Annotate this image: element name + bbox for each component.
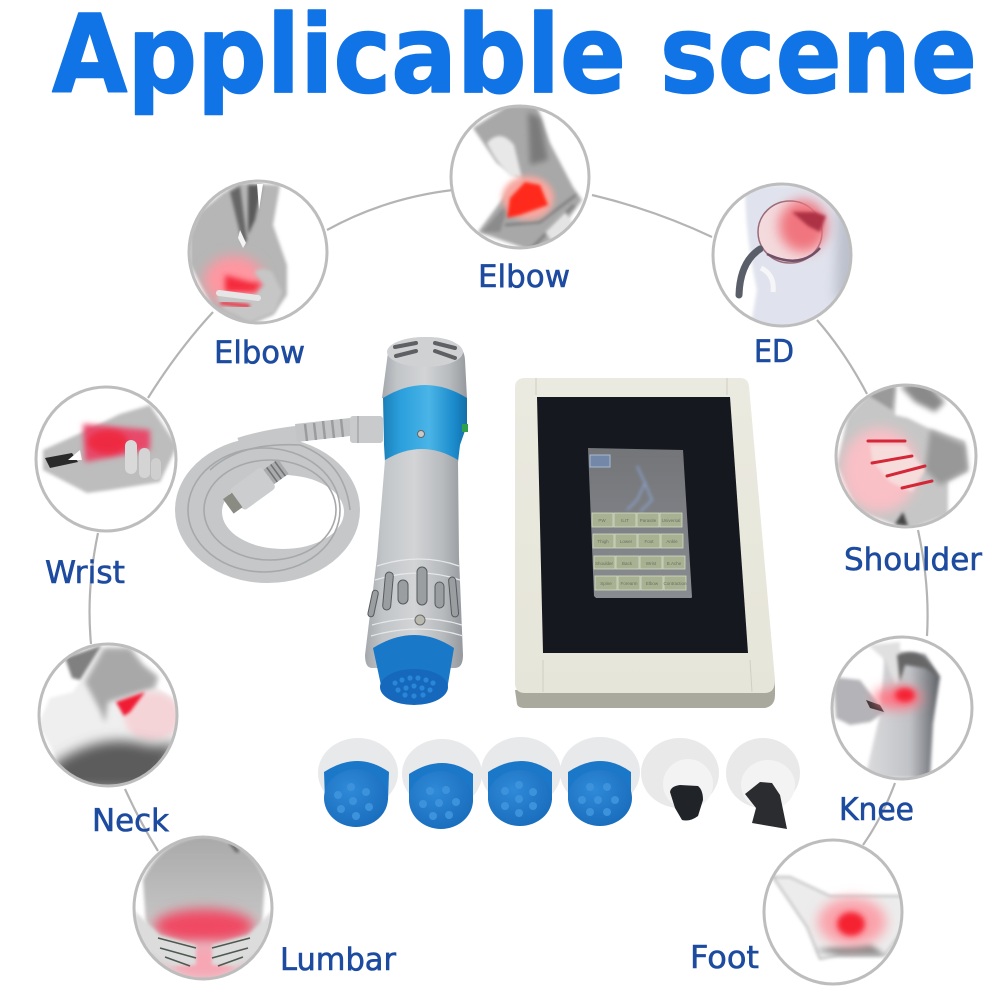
- screen buttons: Shoulder: [595, 561, 614, 566]
- icon: left elbow joint: [189, 181, 327, 326]
- connector lines between circles: [90, 190, 928, 851]
- blue tip 3: [481, 737, 561, 826]
- label: Foot: Foot: [690, 940, 759, 976]
- screen buttons: Elbow: [646, 581, 659, 586]
- screen buttons: Forearm: [620, 581, 638, 586]
- label: Lumbar: Lumbar: [280, 942, 396, 978]
- vented lower section: [367, 559, 463, 636]
- screen buttons: Contraction: [663, 581, 687, 586]
- icon: top elbow joint: [451, 106, 589, 250]
- cable strain relief: [295, 416, 383, 443]
- blue tip 1: [318, 738, 398, 827]
- icon: lumbar: [133, 836, 273, 985]
- treatment tips row: [318, 737, 800, 829]
- handpiece shaft: [365, 449, 463, 668]
- cable coil: [175, 416, 383, 583]
- control unit case: [515, 378, 775, 693]
- screen buttons: ILIT: [621, 518, 629, 523]
- screen buttons: Foot: [644, 539, 654, 544]
- screen buttons: Lower: [620, 539, 633, 544]
- touch screen: [588, 448, 692, 598]
- screen buttons: B.Ache: [667, 561, 682, 566]
- control unit base shadow: [515, 680, 775, 708]
- screen buttons: Back: [622, 561, 633, 566]
- screen buttons: [592, 513, 687, 590]
- blue collar: [383, 385, 468, 462]
- screen buttons: Ankle: [666, 539, 678, 544]
- icon: knee: [832, 637, 972, 779]
- label: Elbow (left): Elbow: [214, 335, 305, 371]
- white tip with black point: [641, 738, 719, 820]
- label: Shoulder: Shoulder: [844, 542, 982, 578]
- label: Neck: Neck: [92, 803, 169, 839]
- shockwave handpiece: [365, 337, 468, 705]
- screen buttons: PW: [598, 518, 606, 523]
- blue silicone tip: [373, 635, 454, 705]
- icon: shoulder: [836, 380, 976, 530]
- icon: wrist: [36, 387, 177, 531]
- label: Knee: Knee: [839, 792, 914, 828]
- blue tip 4: [560, 737, 640, 826]
- icon: neck: [38, 644, 180, 790]
- white tip with black blade: [726, 738, 800, 829]
- handpiece top cap with vents: [382, 337, 467, 398]
- icon: ED anatomy: [713, 184, 860, 330]
- label: ED: ED: [754, 334, 794, 370]
- black face panel: [537, 397, 748, 653]
- screen buttons: Wrist: [646, 561, 657, 566]
- icon: foot: [764, 840, 905, 984]
- control unit: [515, 378, 775, 708]
- label: Wrist: Wrist: [45, 555, 125, 591]
- screen buttons: Thigh: [597, 539, 609, 544]
- blue tip 2: [402, 739, 482, 829]
- cable connector plug: [221, 456, 291, 517]
- screen buttons: Parasite: [640, 518, 657, 523]
- label: Elbow (top): Elbow: [478, 259, 570, 295]
- screen buttons: Universal: [662, 518, 680, 523]
- collar screw: [418, 430, 424, 438]
- body figure on screen: [627, 466, 652, 512]
- screen buttons: Spine: [600, 581, 612, 586]
